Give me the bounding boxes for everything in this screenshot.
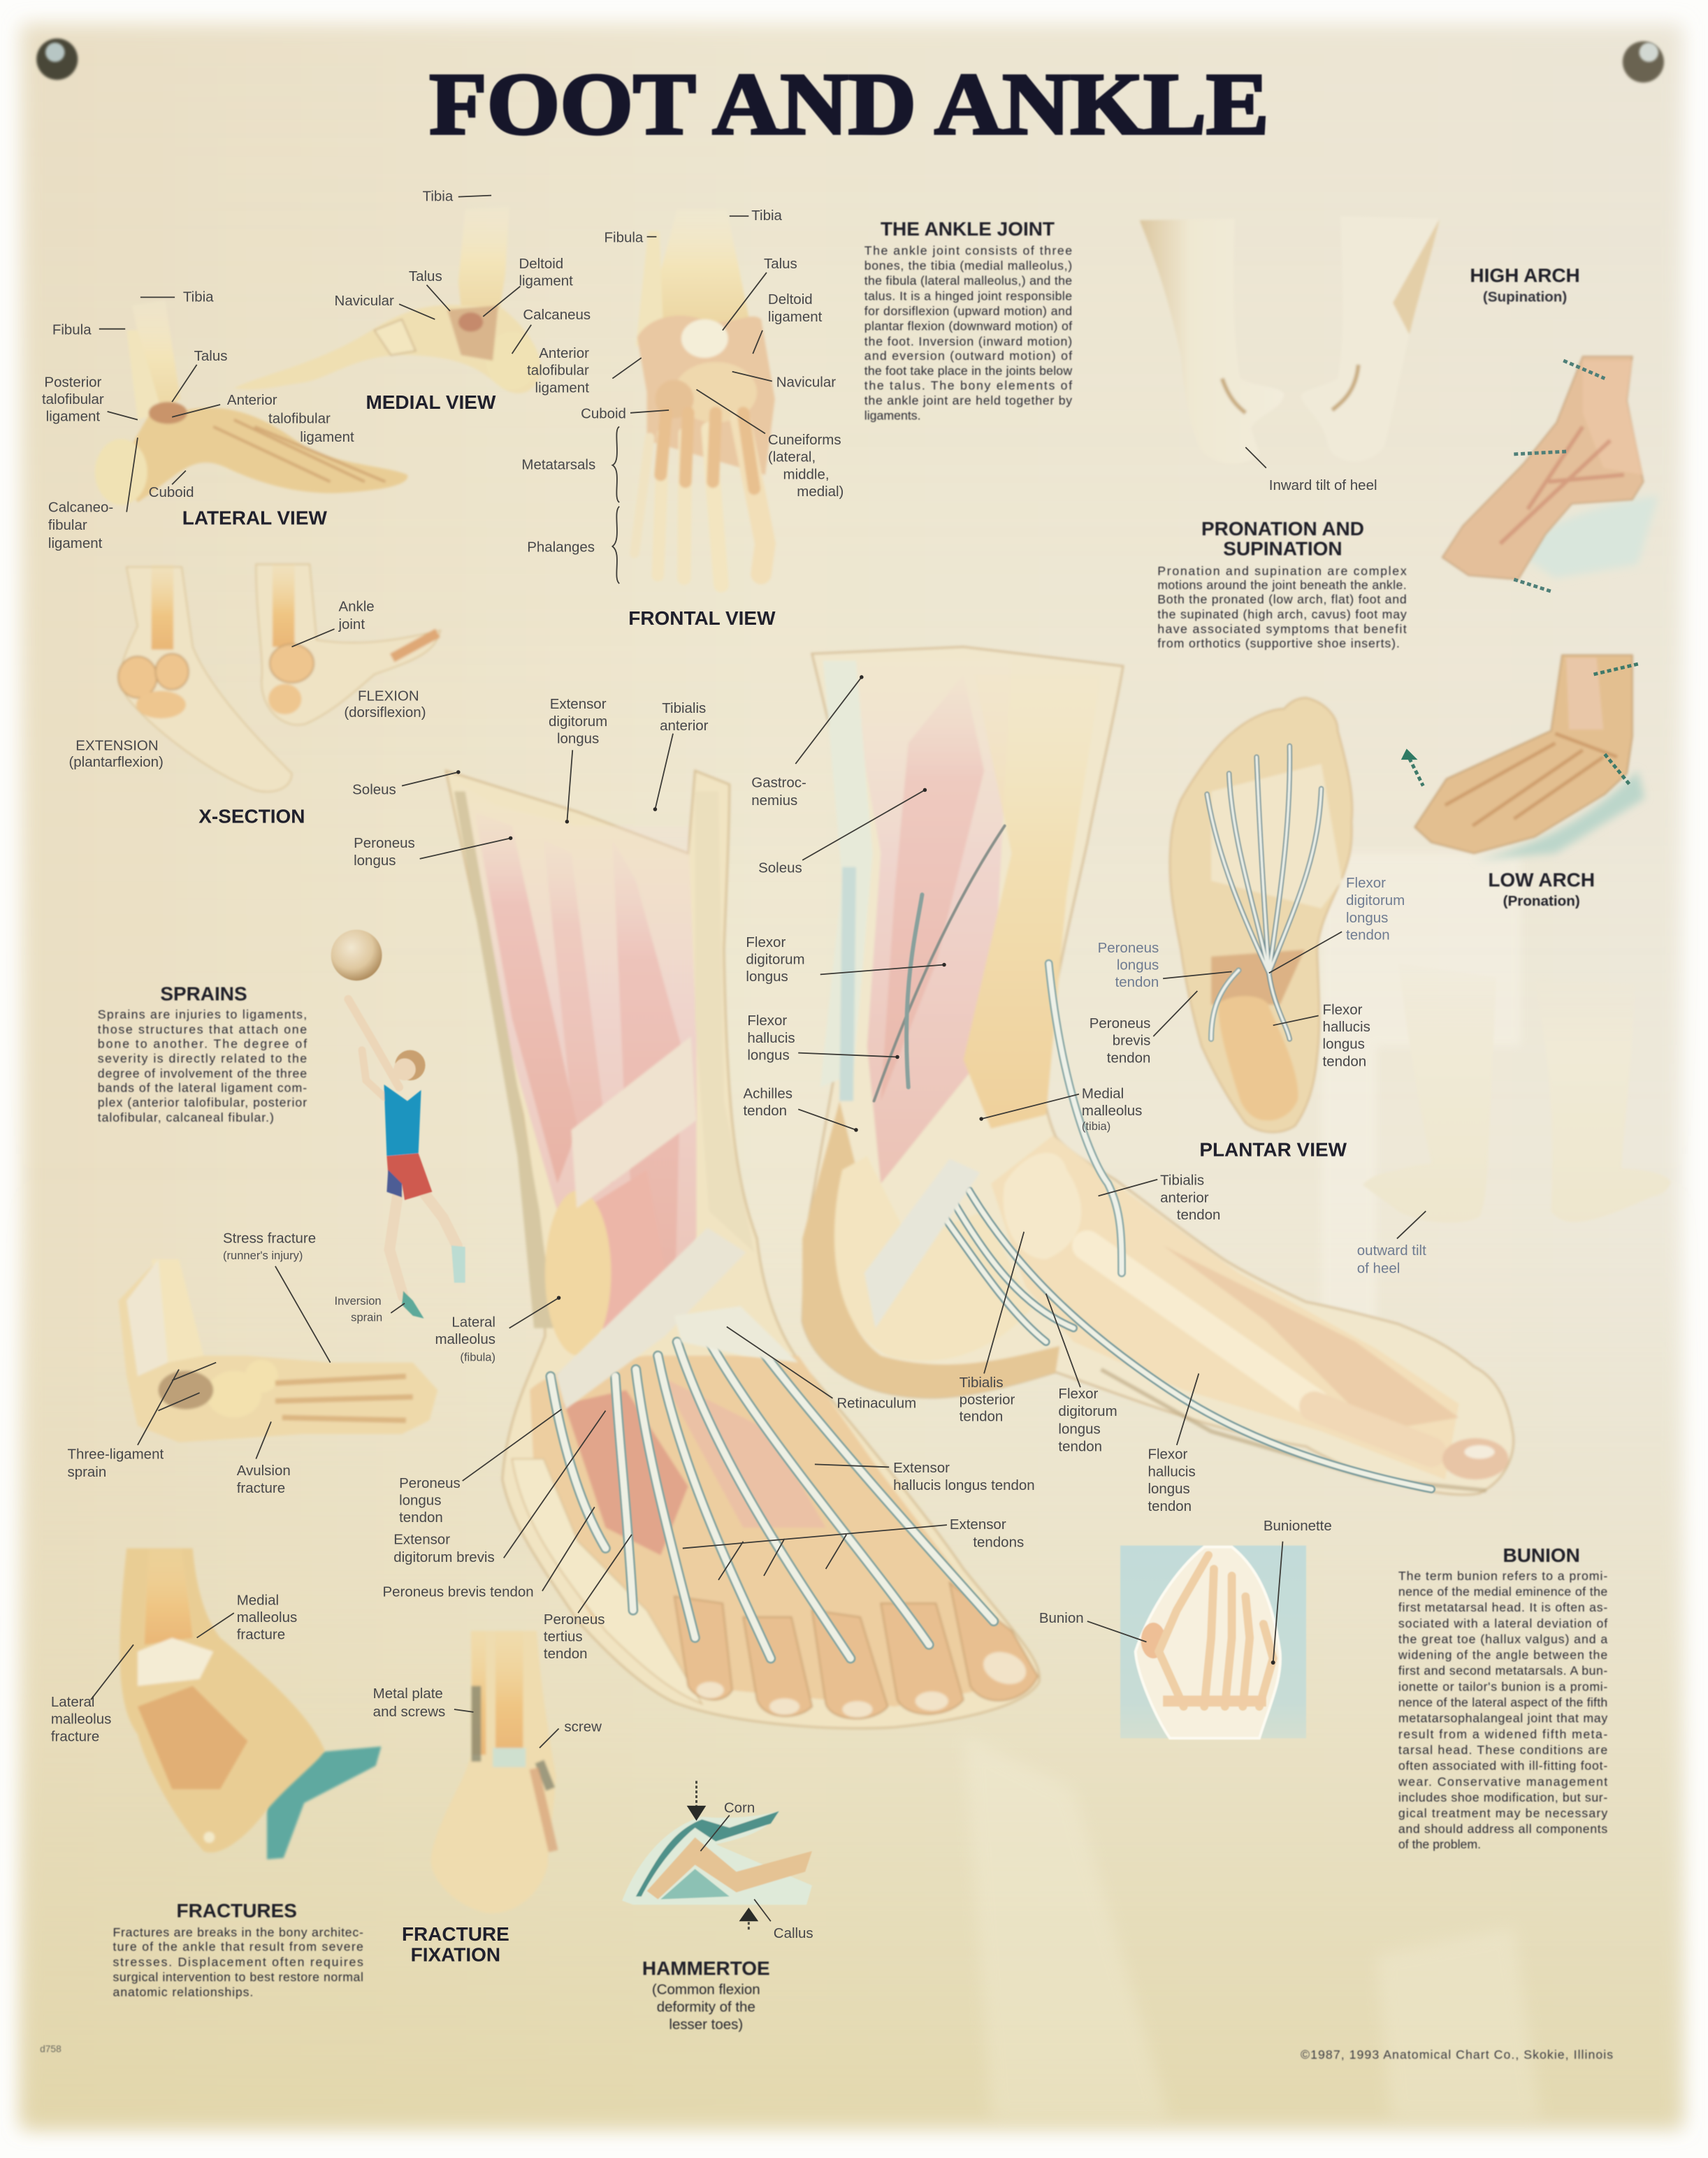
labels: anterior foot: tendons [973,1535,1024,1551]
labels: medial foot: anterior [1160,1189,1209,1205]
labels: lateral view: Talus [194,348,227,364]
labels: frontal view: Deltoid [768,291,813,307]
illustration: fractured ankle [120,1549,325,1853]
heading: hammertoe: (Common flexion [652,1982,760,1998]
panel: sprains text [98,983,307,1124]
illustration: x-section extension foot [118,564,292,792]
text block: pronation description: from orthotics (supportive shoe inserts). [1157,637,1400,651]
labels: stress fracture foot: fracture [237,1480,285,1496]
labels: lateral view: Fibula [52,322,92,338]
labels: stress fracture foot: Stress fracture [223,1230,316,1246]
labels: anterior foot: Extensor [550,696,607,712]
labels: frontal view: middle, [783,466,830,482]
panel: fractures [51,1549,382,1860]
panel: main medial foot and leg [743,647,1514,1514]
heading: bunion: BUNION [1503,1544,1580,1566]
labels: lateral view: Calcaneo- [48,500,113,516]
labels: x-section: joint [338,616,365,632]
text block: bunion description [1398,1569,1607,1851]
text block: ankle joint description: for dorsiflexion (upward motion) and [864,304,1072,318]
labels: lateral view: ligament [48,535,103,551]
labels: fractured ankle: Lateral [51,1694,94,1710]
labels: medial foot: longus [1058,1421,1101,1437]
labels: frontal view: medial) [797,484,844,500]
labels: medial view: Deltoid [519,256,563,272]
labels: anterior foot: Soleus [352,781,396,797]
labels: anterior foot: tendon [399,1509,443,1526]
labels: x-section: Ankle [338,598,375,614]
labels: fixation [373,1686,602,1748]
illustration: ankle with plate and screws [430,1631,556,1913]
labels: anterior foot: Peroneus [354,835,415,851]
text block: ankle joint description: talus. It is a hinged joint responsible [864,289,1072,303]
labels: hammertoe: Corn [724,1800,755,1816]
labels: plantar view: longus [1346,910,1388,926]
labels: fractured ankle: fracture [51,1728,99,1744]
text block: ankle joint description: ligaments. [864,409,921,423]
labels: stress fracture foot [67,1230,405,1496]
arrows: pronation motion [1410,663,1641,786]
panel: plantar view [1090,697,1405,1160]
heading: fracture fixation: FIXATION [411,1943,500,1965]
labels: stress fracture foot: Inversion [335,1294,382,1308]
labels: lateral view: talofibular [268,411,331,427]
arrows: supination motion [1514,361,1605,592]
labels: stress fracture foot: Three-ligament [67,1447,164,1463]
text block: pronation description: the supinated (high arch, cavus) foot may [1157,607,1407,621]
labels: anterior foot: Lateral [451,1314,495,1330]
paragraph: fractures description: surgical intervention to best restore normal [113,1970,363,1984]
heading: low arch: (Pronation) [1503,893,1580,909]
labels: fractured ankle: malleolus [51,1711,111,1728]
heading: frontal view: FRONTAL VIEW [628,607,776,629]
labels: frontal view: Phalanges [527,540,595,556]
labels: anterior foot [352,696,1035,1662]
paragraph: fractures description: anatomic relationships. [113,1985,253,1999]
illustration: high arch foot with arrows [1442,356,1658,592]
text block: sprains description [98,1007,307,1124]
labels: anterior foot: Peroneus brevis tendon [382,1584,534,1600]
labels: stress fracture foot: sprain [351,1311,382,1324]
labels: hammertoe [700,1800,813,1941]
text block: pronation description: motions around the joint beneath the ankle. [1157,578,1407,592]
labels: anterior foot: longus [399,1493,441,1509]
heading: high arch: HIGH ARCH [1470,265,1580,287]
heading: fractures: FRACTURES [177,1899,297,1921]
labels: frontal view [521,208,844,584]
labels: anterior foot: digitorum [549,714,607,730]
heading: hammertoe: lesser toes) [669,2016,743,2032]
labels: medial foot: malleolus [1082,1103,1142,1119]
labels: bunion illustration: Bunion [1039,1610,1084,1626]
labels: x-section [68,598,426,770]
labels: anterior foot: tendon [544,1646,588,1662]
illustration: rear view of legs with outward tilt of heel [1357,964,1671,1277]
text block: bunion description: result from a widened fifth meta- [1398,1727,1607,1741]
illustration: athlete jumping [348,999,465,1319]
labels: x-section: FLEXION [358,688,419,704]
heading: low arch: LOW ARCH [1488,869,1595,890]
text block: bunion description: and should address all components [1398,1822,1607,1836]
text block: bunion description: wear. Conservative management [1398,1774,1607,1788]
labels: plantar view: Peroneus [1090,1015,1150,1031]
labels: anterior foot: Retinaculum [837,1396,916,1412]
text block: bunion description: sociated with a lateral deviation of [1398,1616,1607,1630]
labels: plantar view: Flexor [1346,875,1386,891]
labels: x-section: EXTENSION [75,737,159,753]
paragraph: fractures description [113,1925,363,1999]
labels: x-section: (plantarflexion) [68,754,164,770]
labels: frontal view: Tibia [751,208,783,224]
copyright line: ©1987, 1993 Anatomical Chart Co., Skokie, Illinois [1301,2048,1613,2062]
heading: sprains: SPRAINS [160,983,247,1005]
heading: hammertoe: deformity of the [657,1999,755,2015]
arrow: callus pressure [739,1908,758,1929]
labels: anterior foot: longus [557,730,599,746]
heading: pronation and supination: SUPINATION [1223,538,1342,560]
labels: anterior foot: tertius [544,1628,583,1644]
labels: lateral view: Posterior [44,374,101,390]
label: outward tilt of heel: of heel [1357,1261,1400,1277]
text block: bunion description: includes shoe modification, but sur- [1398,1790,1607,1804]
text block: sprains description: degree of involvement of the three [98,1066,307,1080]
illustration: lateral view bones [95,300,407,505]
heading: x-section: X-SECTION [198,806,305,827]
illustration: frontal view bones [635,209,775,585]
labels: medial foot: Tibialis [1160,1173,1204,1189]
panel: the ankle joint text [864,218,1072,423]
panel: lateral view [42,289,407,551]
labels: medial view: Navicular [335,293,394,309]
labels: anterior foot: malleolus [435,1331,495,1347]
catalog number: d758 [40,2043,61,2054]
text block: sprains description: bone to another. The degree of [98,1037,307,1051]
labels: medial foot: Flexor [1148,1447,1187,1463]
labels: plantar view: tendon [1107,1050,1150,1066]
text block: ankle joint description: the foot take place in the joints below [864,364,1072,378]
labels: plantar view: Flexor [1323,1001,1362,1018]
labels: plantar view: longus [1323,1036,1365,1052]
illustration: low arch foot with arrows [1401,655,1644,860]
icon: top-left screw [36,38,78,80]
text block: bunion description: the great toe (hallux valgus) and a [1398,1632,1607,1646]
text block: bunion description: gical treatment may be necessary [1398,1806,1607,1820]
labels: frontal view: Talus [764,256,797,272]
labels: anterior foot: hallucis longus tendon [893,1477,1035,1493]
labels: frontal view: talofibular [527,363,589,379]
illustration: rear view of legs with inward tilt of heel [1140,216,1440,493]
retinaculum bands [556,1036,798,1410]
labels: anterior foot: longus [354,853,396,869]
text block: ankle joint description: the talus. The bony elements of [864,378,1072,392]
heading: medial view: MEDIAL VIEW [366,391,496,413]
labels: medial view: ligament [519,273,573,289]
text block: pronation description [1157,564,1407,651]
labels: stress fracture foot: Avulsion [237,1463,291,1479]
text block: ankle joint description: plantar flexion (downward motion) of [864,319,1072,333]
heading: pronation and supination: PRONATION AND [1201,518,1364,540]
labels: medial foot: digitorum [1058,1403,1117,1419]
illustration: x-section flexion foot [256,564,440,725]
label: inward tilt of heel: Inward tilt of heel [1269,477,1377,493]
paragraph: fractures description: Fractures are breaks in the bony architec- [113,1925,363,1939]
heading: plantar view: PLANTAR VIEW [1199,1138,1347,1160]
text block: ankle joint description: bones, the tibia (medial malleolus,) [864,259,1072,273]
labels: plantar view: digitorum [1346,892,1405,908]
illustration: plantar view foot [1170,697,1352,1132]
labels: lateral view: ligament [300,429,354,445]
labels: frontal view: Anterior [539,345,589,361]
heading: lateral view: LATERAL VIEW [182,507,327,528]
labels: x-section: (dorsiflexion) [344,704,426,720]
heading: the ankle joint: THE ANKLE JOINT [881,218,1055,240]
labels: medial foot: tendon [1148,1498,1192,1514]
heading: fracture fixation: FRACTURE [402,1923,509,1945]
text block: sprains description: plex (anterior talofibular, posterior [98,1095,307,1109]
arrow: corn pressure [687,1781,706,1820]
labels: medial view: Tibia [423,189,454,205]
text block: pronation description: Both the pronated (low arch, flat) foot and [1157,593,1407,607]
labels: anterior foot: digitorum brevis [393,1549,495,1565]
panel: frontal view [521,208,844,629]
panel: main anterior foot and leg [352,696,1039,1728]
text block: bunion description: widening of the angle between the [1398,1648,1607,1662]
labels: plantar view [1090,875,1405,1069]
illustration: teal ground shadow [267,1746,382,1860]
illustration: anterior leg and foot [446,771,1039,1728]
labels: medial view [335,189,591,354]
text block: fractures [113,1899,363,1999]
labels: plantar view: hallucis [1323,1019,1370,1035]
panel: bunion illustration [1039,1518,1332,1738]
labels: medial foot: (tibia) [1082,1120,1110,1133]
labels: anterior foot: (fibula) [460,1351,495,1364]
text block: bunion description: often associated with ill-fitting foot- [1398,1759,1607,1773]
labels: frontal view: Navicular [776,374,836,390]
text block: ankle joint description: the ankle joint are held together by [864,393,1072,407]
text block: bunion description: tarsal head. These conditions are [1398,1743,1607,1757]
heading: low arch [1488,869,1595,909]
labels: plantar view: tendon [1323,1053,1366,1069]
labels: medial foot: Gastroc- [751,774,806,790]
title: FOOT AND ANKLE [429,56,1269,153]
text block: bunion description: nence of the medial eminence of the [1398,1585,1607,1599]
text block: bunion description: ionette or tailor's bunion is a promi- [1398,1679,1607,1693]
panel: fracture fixation [373,1631,602,1965]
labels: frontal view: Fibula [605,230,644,246]
labels: fixation: screw [564,1718,602,1735]
labels: anterior foot: Extensor [393,1532,450,1548]
labels: frontal view: ligament [768,309,823,325]
labels: lateral view [42,289,354,551]
labels: medial foot: hallucis [1148,1463,1196,1479]
text block: pronation description: have associated symptoms that benefit [1157,622,1407,636]
labels: plantar view: longus [1117,957,1159,973]
labels: lateral view: Cuboid [149,484,194,500]
text block: ankle joint description [864,243,1072,423]
labels: anterior foot: Tibialis [662,700,706,716]
text block: sprains description: Sprains are injuries to ligaments, [98,1007,307,1021]
illustration: volleyball [331,929,382,980]
labels: medial foot: Flexor [1058,1386,1098,1402]
labels: medial foot: tendon [1177,1207,1220,1223]
text block: ankle joint description: the fibula (lateral malleolus,) and the [864,274,1072,288]
label: outward tilt of heel: outward tilt [1357,1243,1426,1259]
text block: sprains description: bands of the lateral ligament com- [98,1081,307,1095]
labels: medial foot: Achilles [743,1086,793,1102]
labels: lateral view: talofibular [42,391,104,407]
text block: bunion description: first metatarsal head. It is often as- [1398,1600,1607,1614]
labels: bunion illustration: Bunionette [1264,1518,1332,1534]
labels: fixation: and screws [373,1704,445,1720]
heading: hammertoe: HAMMERTOE [642,1957,770,1979]
labels: anterior foot: Peroneus [544,1612,605,1628]
labels: medial foot: hallucis [747,1030,795,1046]
labels: medial foot: longus [747,1047,790,1063]
labels: medial foot: posterior [960,1391,1015,1407]
text block: ankle joint description: The ankle joint consists of three [864,243,1072,257]
labels: fractured ankle: fracture [237,1627,285,1643]
illustration: stress fracture foot [118,1259,437,1442]
text block: bunion description: first and second metatarsals. A bun- [1398,1664,1607,1678]
labels: stress fracture foot: (runner's injury) [223,1249,303,1262]
text block: bunion description: nence of the lateral aspect of the fifth [1398,1695,1607,1709]
text block: sprains description: severity is directly related to the [98,1051,307,1065]
heading: high arch [1470,265,1580,305]
labels: medial foot [743,675,1220,1514]
labels: medial view: Talus [409,268,442,284]
labels: hammertoe: Callus [774,1925,813,1941]
labels: anterior foot: Extensor [950,1516,1006,1533]
text block: sprains description: talofibular, calcaneal fibular.) [98,1110,274,1124]
labels: medial foot: longus [746,969,788,985]
labels: medial foot: Soleus [758,860,802,876]
labels: plantar view: Peroneus [1098,940,1159,956]
labels: frontal view: Metatarsals [521,457,595,473]
illustration: medial view bones [234,206,541,393]
labels: medial foot: tendon [960,1409,1003,1425]
panel: bunion text [1398,1544,1607,1851]
labels: bunion illustration [1039,1518,1332,1665]
heading: high arch: (Supination) [1483,289,1567,305]
labels: anterior foot: anterior [660,718,709,734]
panel: pronation and supination text [1157,518,1407,651]
labels: medial foot: tendon [743,1103,787,1119]
labels: fractured ankle: Medial [237,1592,279,1608]
labels: anterior foot: Peroneus [399,1475,461,1491]
text block: ankle joint description: and eversion (outward motion) of [864,349,1072,363]
labels: frontal view: ligament [535,379,589,396]
labels: medial foot: Medial [1082,1086,1124,1102]
labels: fixation: Metal plate [373,1686,443,1702]
panel: x-section [68,564,440,827]
labels: medial foot: longus [1148,1481,1190,1497]
labels: lateral view: ligament [46,409,100,425]
labels: medial foot: tendon [1058,1439,1102,1455]
labels: plantar view: brevis [1113,1033,1150,1049]
labels: plantar view: tendon [1346,927,1390,943]
panel: hammertoe [622,1781,813,2032]
text block: bunion description: metatarsophalangeal joint that may [1398,1711,1607,1725]
labels: frontal view: (lateral, [768,449,816,465]
labels: medial foot: Flexor [747,1013,787,1029]
labels: fractured ankle [51,1592,297,1744]
text block: bunion description: The term bunion refers to a promi- [1398,1569,1607,1583]
labels: lateral view: Tibia [183,289,214,305]
text block: ankle joint description: the foot. Inversion (inward motion) [864,334,1072,348]
icon: top-right screw [1623,41,1664,82]
labels: anterior foot: Extensor [893,1460,950,1476]
labels: medial view: Calcaneus [523,307,591,323]
text block: bunion description: of the problem. [1398,1837,1481,1851]
panel: medial view [234,189,591,413]
labels: lateral view: Anterior [227,392,277,408]
heading: hammertoe [642,1957,770,2032]
labels: frontal view: Cuboid [581,406,626,422]
panel: stress fracture foot [67,1230,437,1496]
paragraph: fractures description: ture of the ankle that result from severe [113,1940,363,1954]
labels: medial foot: nemius [751,792,797,809]
labels: fractured ankle: malleolus [237,1609,297,1625]
labels: medial foot: Flexor [746,934,786,950]
text block: sprains description: those structures that attach one [98,1022,307,1036]
labels: lateral view: fibular [48,517,87,533]
paragraph: fractures description: stresses. Displacement often requires [113,1955,363,1969]
labels: medial foot: digitorum [746,952,805,968]
text block: pronation description: Pronation and supination are complex [1157,564,1407,578]
illustration: bunion foot x-ray [1120,1546,1306,1738]
labels: medial foot: Tibialis [960,1375,1004,1391]
labels: frontal view: Cuneiforms [768,432,841,448]
illustration: hammertoe toe in shoe [622,1811,812,1905]
labels: stress fracture foot: sprain [67,1464,106,1480]
illustration: medial leg and foot [802,647,1514,1495]
labels: plantar view: tendon [1115,974,1159,990]
